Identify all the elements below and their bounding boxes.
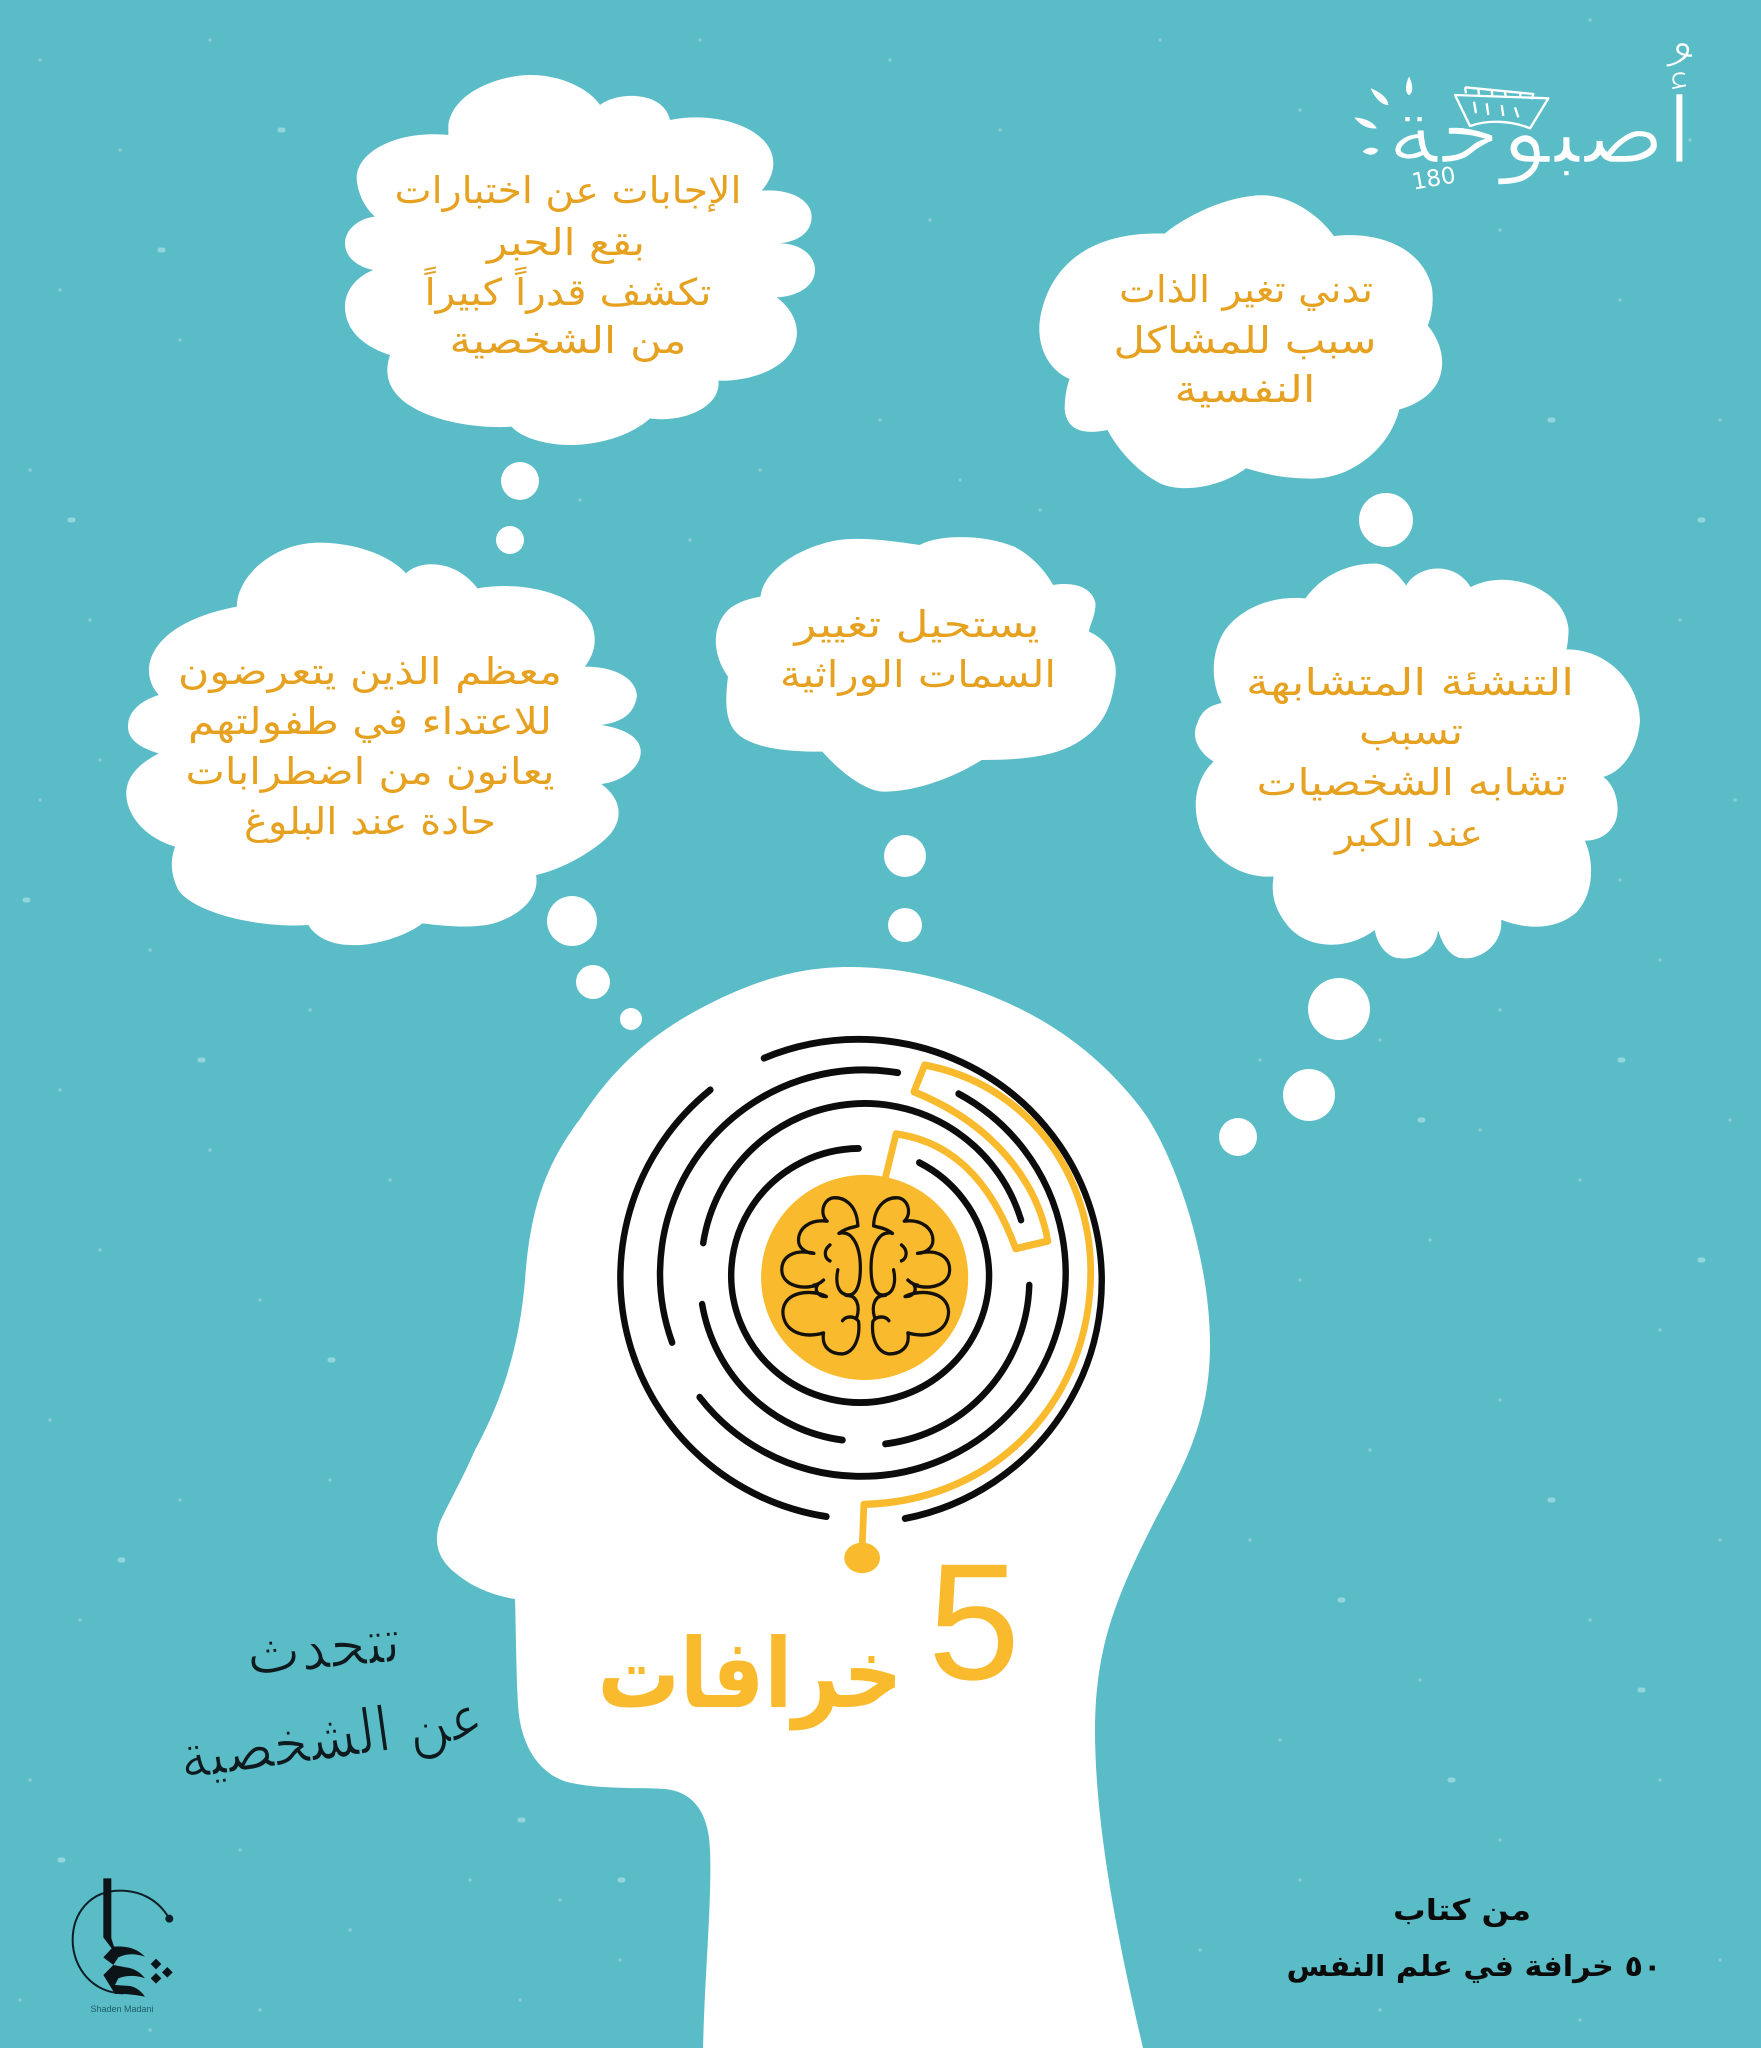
thought cloud: inherited traits: السمات الوراثية: [780, 653, 1056, 696]
thought cloud: self-change decline: تدني تغير الذات: [1119, 268, 1373, 311]
thought cloud: inkblot tests: الإجابات عن اختبارات: [394, 169, 742, 212]
thought cloud: inkblot tests: بقع الحبر: [485, 221, 645, 264]
thought cloud: self-change decline: سبب للمشاكل: [1114, 319, 1376, 362]
handwritten subtitle: عن الشخصية: [174, 1679, 488, 1794]
thought cloud: self-change decline: [1039, 195, 1442, 488]
thought cloud: childhood abuse: يعانون من اضطرابات: [186, 750, 554, 793]
title number 5: 5: [928, 1530, 1020, 1715]
book source note: ٥٠ خرافة في علم النفس: [1286, 1949, 1662, 1983]
thought cloud: inkblot tests: تكشف قدراً كبيراً: [423, 266, 712, 314]
logo: Osbouha 180: 180: [1410, 162, 1458, 196]
thought cloud: childhood abuse: للاعتداء في طفولتهم: [188, 700, 552, 743]
thought bubble dots: [496, 462, 1413, 1156]
thought cloud: childhood abuse: حادة عند البلوغ: [244, 800, 496, 843]
thought cloud: childhood abuse: معظم الذين يتعرضون: [178, 650, 562, 693]
thought cloud: similar upbringing: التنشئة المتشابهة: [1246, 661, 1574, 704]
logo mark: [73, 1878, 173, 1997]
book source note: [1286, 1893, 1662, 1983]
title word: myths: خرافات: [598, 1618, 902, 1730]
yellow maze path: [844, 1065, 1091, 1573]
maze with brain: [620, 1039, 1102, 1573]
icon: sun rays: [1354, 77, 1412, 155]
book source note: من كتاب: [1393, 1893, 1531, 1927]
icon: pavilion: [1455, 87, 1548, 128]
thought cloud: inkblot tests: [345, 75, 815, 445]
handwritten subtitle: [174, 1604, 488, 1794]
thought cloud: self-change decline: النفسية: [1174, 368, 1316, 411]
thought cloud: similar upbringing: تسبب: [1359, 710, 1463, 753]
thought cloud: inherited traits: [716, 537, 1116, 792]
handwritten subtitle: تتحدث: [243, 1604, 403, 1690]
maze rings: [620, 1039, 1102, 1518]
thought cloud: similar upbringing: عند الكبر: [1333, 812, 1483, 855]
thought cloud: inkblot tests: من الشخصية: [450, 319, 686, 362]
logo: Osbouha 180: أُصبوحة: [1387, 43, 1694, 186]
thought cloud: childhood abuse: [126, 543, 641, 945]
yellow core disc: [761, 1175, 968, 1380]
brain icon: [782, 1198, 950, 1354]
thought cloud: similar upbringing: تشابه الشخصيات: [1256, 761, 1568, 804]
thought cloud: similar upbringing: [1195, 564, 1640, 958]
thought cloud: inherited traits: يستحيل تغيير: [792, 603, 1040, 646]
author logo: Shaden Madani: [90, 2004, 154, 2014]
author logo: [73, 1878, 173, 2014]
head silhouette: [437, 967, 1210, 2048]
logo: Osbouha 180: [1354, 43, 1694, 196]
